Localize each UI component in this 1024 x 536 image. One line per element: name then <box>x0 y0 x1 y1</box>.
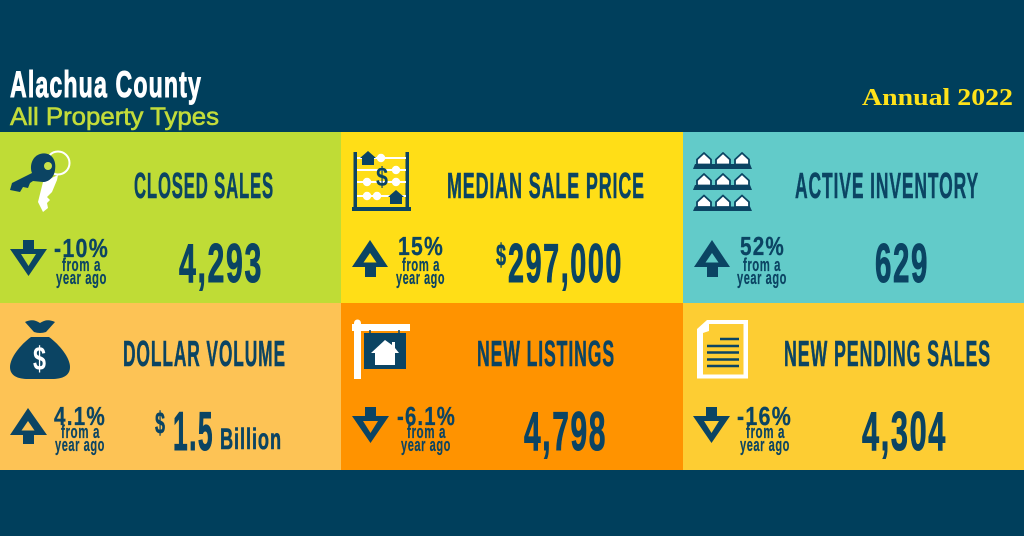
value: 4,798 <box>524 400 607 462</box>
icon: abacus: $ <box>376 162 388 192</box>
change text: 4.1% <box>54 401 106 431</box>
change text: from a <box>407 422 446 442</box>
panel: active inventory <box>683 132 1024 303</box>
change text: year ago <box>737 268 787 288</box>
change text <box>54 401 106 455</box>
change text: 52% <box>740 231 785 261</box>
panel: new pending sales <box>683 303 1024 470</box>
change text: -10% <box>54 233 109 263</box>
change text <box>737 231 787 288</box>
panel: closed sales: CLOSED SALES <box>134 165 274 206</box>
panel: median sale price <box>341 132 683 303</box>
icon: up arrow <box>10 408 47 444</box>
value: 4,304 <box>862 400 947 462</box>
icon: money bag: $ <box>33 340 46 377</box>
change text <box>737 401 792 455</box>
change text: from a <box>746 422 785 442</box>
value: 1.5 <box>173 400 214 462</box>
panel: new listings: NEW LISTINGS <box>477 333 615 374</box>
change text: year ago <box>396 268 445 288</box>
icon: down arrow <box>10 240 47 276</box>
change text: year ago <box>55 435 105 455</box>
change text: year ago <box>401 435 451 455</box>
change text <box>396 231 445 288</box>
value: 4,293 <box>179 232 263 294</box>
icon: abacus <box>352 151 411 211</box>
value: $ <box>155 405 165 440</box>
change text: -16% <box>737 401 792 431</box>
value: Billion <box>220 423 282 456</box>
header: title block <box>10 64 219 131</box>
subtitle: All Property Types <box>10 103 219 131</box>
change text: from a <box>62 255 101 275</box>
change text: year ago <box>740 435 790 455</box>
value: 629 <box>875 232 929 294</box>
panel: median sale price: MEDIAN SALE PRICE <box>447 165 645 206</box>
icon: money bag <box>10 320 70 379</box>
icon: up arrow <box>694 240 730 277</box>
change text: 15% <box>398 231 444 261</box>
change text <box>54 233 109 288</box>
icon: document <box>697 320 748 378</box>
change text: from a <box>743 255 781 275</box>
icon: keys <box>10 152 70 212</box>
panel: dollar volume <box>0 303 341 470</box>
change text: year ago <box>56 268 107 288</box>
icon: houses on shelves <box>693 153 752 211</box>
period label: Annual 2022 <box>862 85 1013 111</box>
title: Alachua County <box>10 64 202 105</box>
value <box>155 400 282 462</box>
value: $ <box>496 237 506 272</box>
change text <box>397 401 456 455</box>
value <box>496 232 623 294</box>
change text: from a <box>402 255 440 275</box>
icon: down arrow <box>352 407 389 443</box>
icon: down arrow <box>693 407 730 443</box>
change text: -6.1% <box>397 401 456 431</box>
value: 297,000 <box>508 232 623 294</box>
icon: house sign <box>352 320 410 379</box>
panel: new listings <box>341 303 683 470</box>
icon: up arrow <box>352 240 388 277</box>
panel: dollar volume: DOLLAR VOLUME <box>123 333 286 374</box>
change text: from a <box>61 422 100 442</box>
panel: closed sales <box>0 132 341 303</box>
